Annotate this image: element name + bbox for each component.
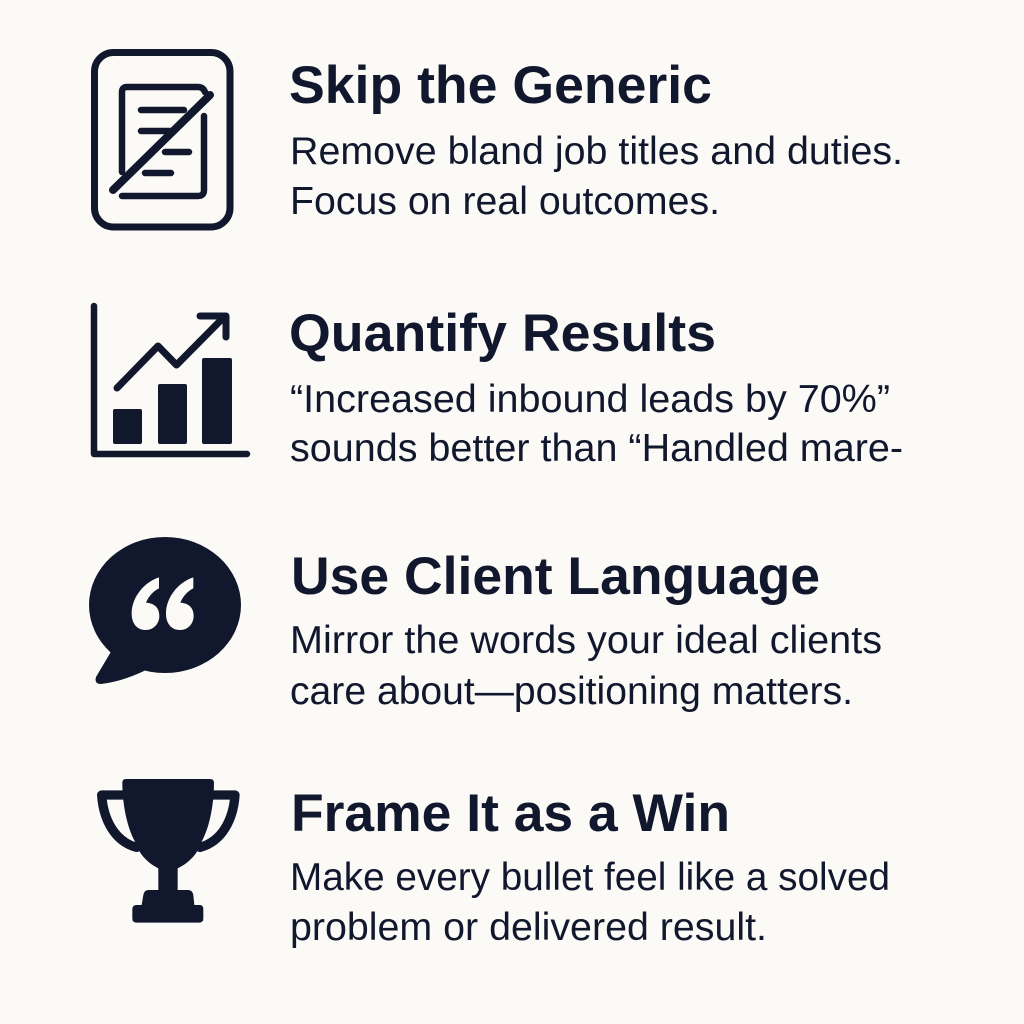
heading: Skip the Generic [289, 56, 712, 115]
heading: Quantify Results [289, 304, 716, 363]
text block: Focus on real outcomes. [290, 180, 720, 223]
panel: use client language [89, 537, 882, 713]
icon: trophy [102, 779, 235, 923]
text block: care about—positioning matters. [290, 670, 853, 713]
panel: frame it as a win [102, 779, 890, 949]
icon: quote speech bubble [89, 537, 241, 684]
panel: skip the generic [94, 52, 903, 227]
text block: “Increased inbound leads by 70%” [290, 378, 890, 421]
icon: crossed-out document [94, 52, 230, 227]
heading: Use Client Language [291, 547, 820, 606]
icon: bar chart with rising arrow [94, 306, 247, 454]
text block: Make every bullet feel like a solved [290, 856, 890, 899]
text block: problem or delivered result. [290, 906, 767, 949]
panel: quantify results [94, 304, 903, 470]
text block: Remove bland job titles and duties. [290, 130, 903, 173]
heading: Frame It as a Win [291, 784, 730, 843]
text block: Mirror the words your ideal clients [290, 619, 882, 662]
text block: sounds better than “Handled mare- [290, 427, 903, 470]
